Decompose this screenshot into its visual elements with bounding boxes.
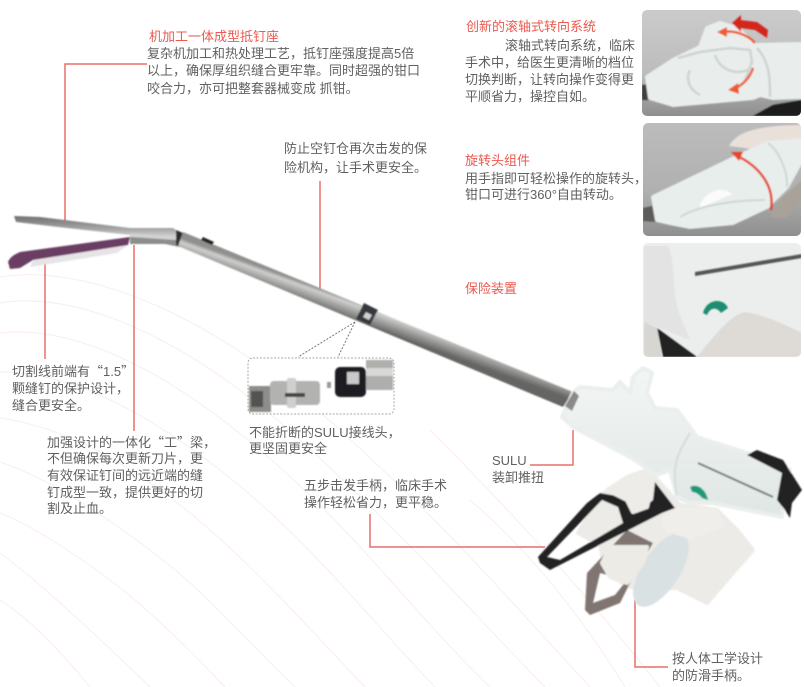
- text: five-step trigger: [304, 478, 447, 510]
- black trigger: [538, 482, 675, 570]
- text: roller steering: 滚轴式转向系统，临床: [505, 38, 635, 53]
- text: staple protection: 颗缝钉的保护设计，: [12, 381, 129, 396]
- text: empty cartridge lockout: [284, 141, 427, 175]
- inset: SULU connector: [248, 322, 394, 414]
- icon: rotation arrows: [740, 20, 768, 38]
- shaft band: [356, 303, 378, 325]
- text: anti-slip handle: 按人体工学设计: [672, 651, 763, 666]
- text: roller steering: [465, 19, 635, 104]
- text: roller steering: 手术中，给医生更清晰的档位: [465, 55, 634, 70]
- text: SULU release button: SULU: [492, 453, 527, 468]
- text: I-beam: 不但确保每次更新刀片，更: [47, 451, 203, 466]
- text: anvil: 以上，确保厚组织缝合更牢靠。同时超强的钳口: [147, 63, 420, 78]
- thumb: [663, 510, 722, 537]
- lower purple jaw: [8, 237, 130, 269]
- text: I-beam: 钉成型一致，提供更好的切: [47, 485, 203, 500]
- text: staple protection: 切割线前端有“1.5”: [12, 361, 134, 380]
- panel: rotating head photo: [643, 123, 802, 236]
- scale slot: [698, 463, 773, 497]
- text: I-beam: 加强设计的一体化“工”梁，: [47, 432, 216, 451]
- text: SULU release button: 装卸推扭: [492, 470, 544, 485]
- shaft: [178, 232, 573, 407]
- text: SULU release button: [492, 453, 544, 485]
- text: five-step trigger: 操作轻松省力，更平稳。: [304, 495, 447, 510]
- glove hand mass: [578, 472, 753, 603]
- text: SULU connector: 不能折断的SULU接线头，: [249, 425, 401, 440]
- panel: roller steering photo: [642, 10, 802, 116]
- text: five-step trigger: 五步击发手柄，临床手术: [304, 478, 447, 493]
- black end cap: [747, 450, 802, 518]
- text: I-beam: 割及止血。: [47, 501, 112, 516]
- text: rotating head: 用手指即可轻松操作的旋转头，: [465, 171, 647, 186]
- grey handle: [585, 530, 653, 615]
- text: safety device: 保险装置: [465, 281, 517, 296]
- text: anvil: [147, 29, 420, 96]
- text: anvil: 咬合力，亦可把整套器械变成 抓钳。: [147, 81, 359, 96]
- text: empty cartridge lockout: 险机构，让手术更安全。: [284, 160, 427, 175]
- text: staple protection: [12, 361, 134, 413]
- text: rotating head: 钳口可进行360°自由转动。: [465, 187, 622, 202]
- text: anvil: 复杂机加工和热处理工艺，抵钉座强度提高5倍: [147, 46, 414, 61]
- text: anti-slip handle: 的防滑手柄。: [672, 668, 750, 683]
- text: staple protection: 缝合更安全。: [12, 398, 90, 413]
- icon: rotation arrow: [735, 155, 772, 210]
- leader lines: [45, 64, 668, 667]
- wrist disc: [622, 524, 700, 616]
- text: I-beam: 有效保证钉间的远近端的缝: [47, 468, 203, 483]
- text: anti-slip handle: [672, 651, 763, 683]
- text: roller steering: 创新的滚轴式转向系统: [466, 19, 596, 34]
- green indicator: [690, 486, 708, 500]
- text: I-beam: [47, 432, 216, 516]
- text: empty cartridge lockout: 防止空钉仓再次击发的保: [284, 141, 427, 156]
- lower fingers: [602, 547, 647, 583]
- handle body: [562, 368, 790, 517]
- underside of lower jaw: [30, 245, 128, 267]
- top fingers: [607, 470, 653, 512]
- text: anvil: 机加工一体成型抵钉座: [149, 29, 279, 44]
- text: rotating head: 旋转头组件: [465, 153, 530, 168]
- upper anvil jaw: [14, 216, 183, 239]
- text: SULU connector: [249, 425, 401, 456]
- text: roller steering: 切换判断，让转向操作变得更: [465, 72, 634, 87]
- jaw hinge: [130, 233, 180, 247]
- text: roller steering: 平顺省力，操控自如。: [465, 89, 595, 104]
- stapler instrument: [8, 216, 802, 616]
- text: rotating head: [465, 153, 647, 202]
- panel: safety device photo: [643, 243, 802, 357]
- text: SULU connector: 更坚固更安全: [249, 441, 327, 456]
